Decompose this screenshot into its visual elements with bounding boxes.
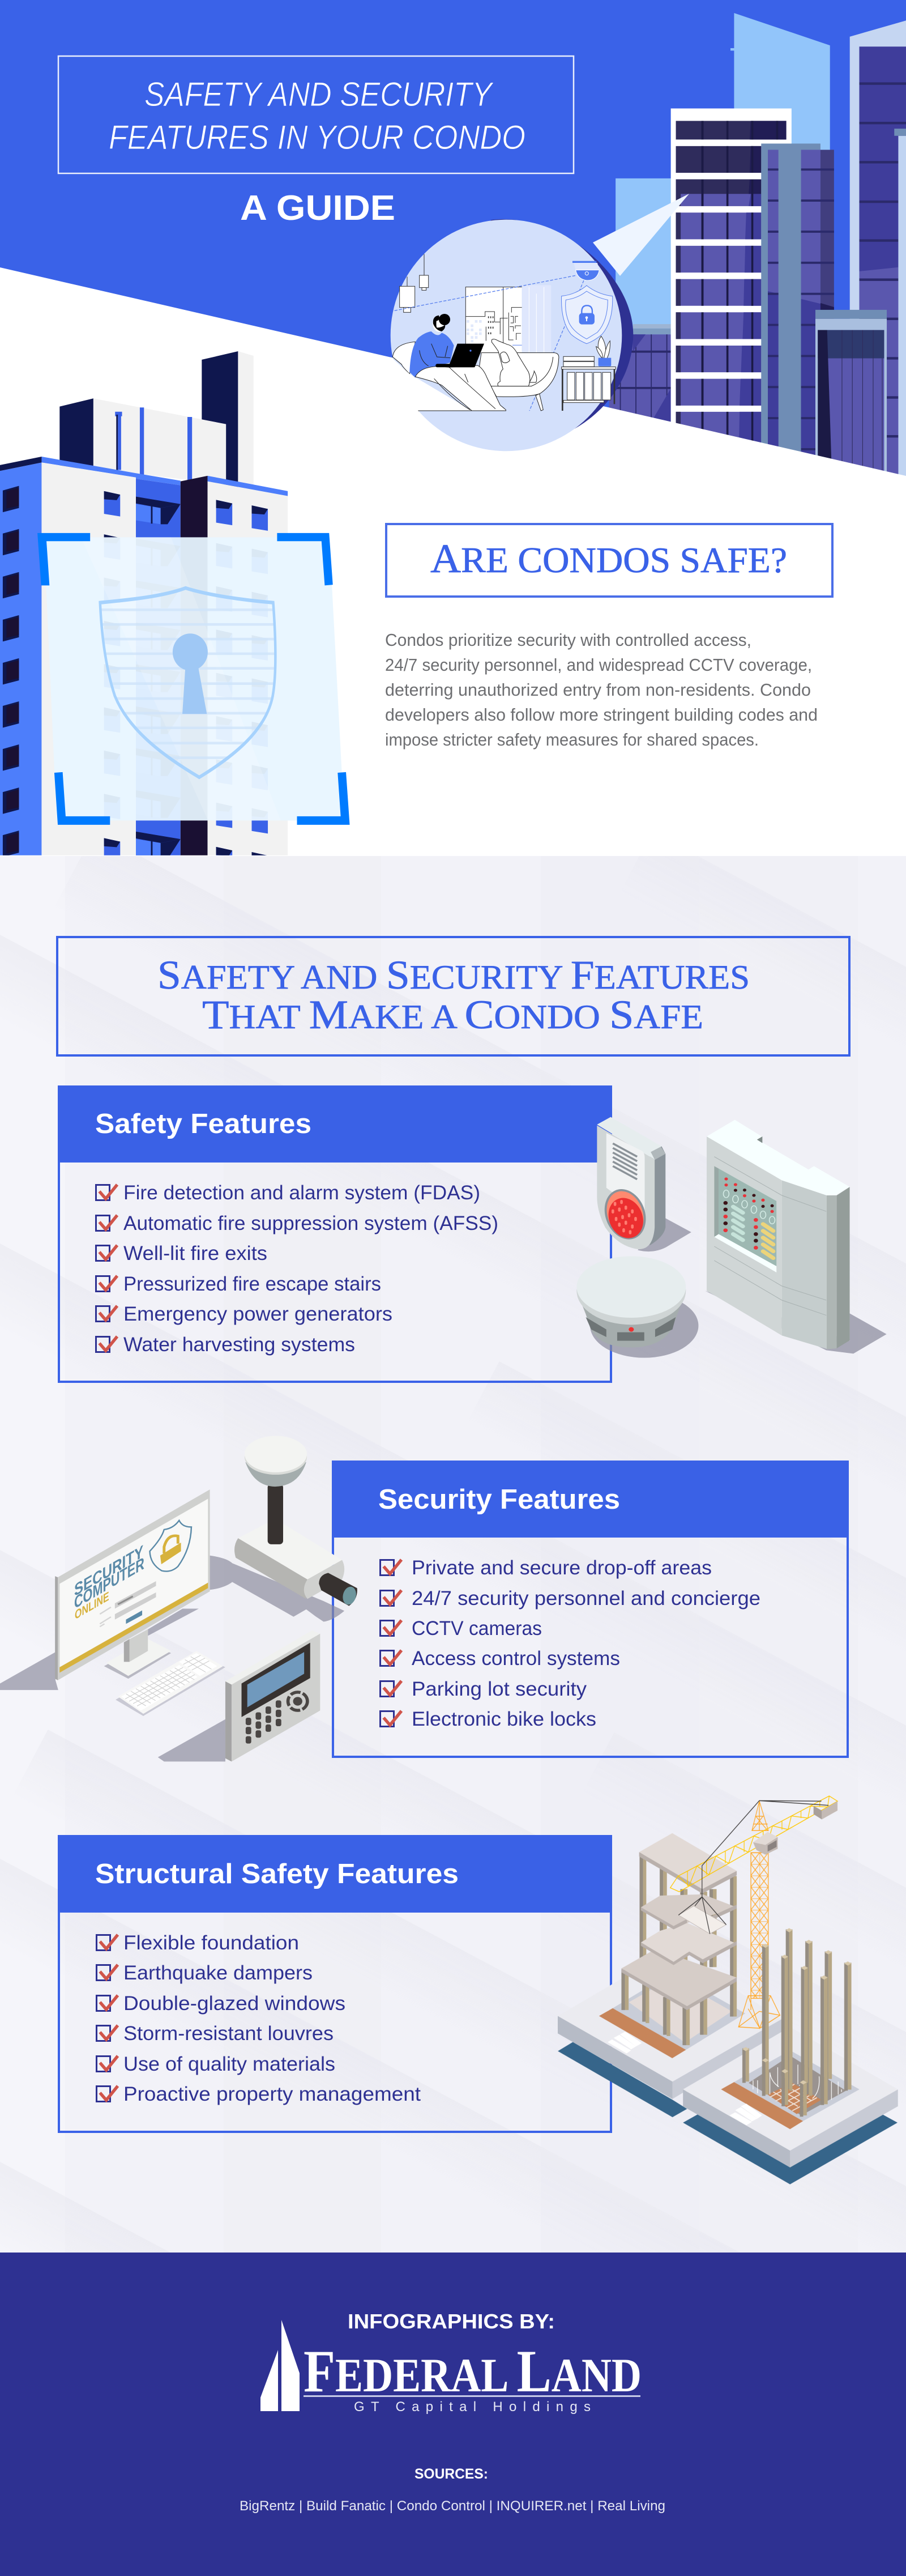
foundation columns — [742, 1928, 852, 2117]
translucent scan panel — [44, 537, 344, 820]
panel title: Structural Safety Features — [95, 1859, 459, 1889]
subtitle: a guide: A GUIDE — [240, 189, 395, 228]
checklist — [96, 1932, 421, 2105]
white diagonal section — [0, 267, 906, 856]
panel header — [332, 1461, 849, 1536]
heading text: ARE CONDOS SAFE? — [430, 536, 787, 581]
checklist: Double-glazed windows — [123, 1992, 345, 2015]
recessed balconies — [136, 497, 181, 859]
intro paragraph: deterring unauthorized entry from non-residents. Condo — [385, 680, 811, 700]
checklist: Well-lit fire exits — [123, 1242, 267, 1264]
left platform — [558, 1949, 781, 2117]
smoke detector — [576, 1256, 698, 1358]
curtain — [522, 285, 551, 353]
windows on front faces — [104, 491, 268, 878]
checklist: Fire detection and alarm system (FDAS) — [123, 1182, 480, 1204]
intro paragraph: impose stricter safety measures for shared spaces. — [385, 730, 759, 750]
scan corner brackets — [37, 533, 350, 825]
intro paragraph: Condos prioritize security with controlled access, — [385, 630, 751, 650]
construction site illustration — [558, 1796, 898, 2185]
right platform — [683, 2027, 898, 2185]
panel title: Security Features — [378, 1484, 620, 1515]
front low tower — [815, 310, 887, 493]
lamps — [400, 254, 429, 312]
screen text: security computer online: SECURITY — [74, 1542, 143, 1600]
checklist: Emergency power generators — [123, 1303, 392, 1325]
footer band — [0, 2253, 906, 2576]
monitor — [55, 1489, 210, 1680]
panel header — [58, 1085, 612, 1161]
light textured background section — [0, 856, 906, 2253]
window view — [465, 287, 522, 353]
checklist — [96, 1182, 498, 1356]
crane — [670, 1796, 837, 2028]
checklist — [381, 1557, 760, 1730]
armchair back — [392, 342, 415, 374]
checklist: Pressurized fire escape stairs — [123, 1273, 381, 1295]
suspended slab — [678, 1897, 726, 1934]
armchair seat — [391, 357, 472, 411]
white frame tower — [671, 108, 792, 497]
checklist: Use of quality materials — [123, 2053, 335, 2075]
checklist: 24/7 security personnel and concierge — [412, 1587, 760, 1610]
panel highlights — [216, 820, 268, 821]
ceiling camera — [572, 261, 599, 280]
fire alarm control panel — [705, 1120, 887, 1353]
panel: security features — [332, 1461, 849, 1757]
checklist: Earthquake dampers — [123, 1962, 313, 1984]
person — [409, 314, 506, 411]
infographics by: INFOGRAPHICS BY: — [348, 2310, 555, 2333]
title text — [109, 75, 525, 156]
title box — [58, 56, 574, 173]
panel header — [58, 1835, 612, 1911]
dark crescent — [491, 219, 633, 429]
light blue tower — [730, 13, 830, 218]
circular illustration: resident in secure condo — [391, 219, 633, 451]
checklist: Private and secure drop-off areas — [412, 1557, 712, 1579]
section heading text — [157, 952, 750, 1037]
far right tower — [850, 20, 906, 497]
sources list: BigRentz | Build Fanatic | Condo Control | INQUIRER.net | Real Living — [240, 2498, 665, 2514]
checklist: Flexible foundation — [123, 1932, 299, 1954]
section heading box — [57, 937, 849, 1055]
concrete building frame — [621, 1833, 737, 2045]
sofa — [480, 353, 559, 411]
checklist: Automatic fire suppression system (AFSS) — [123, 1212, 498, 1234]
panel: structural safety features — [58, 1835, 612, 2132]
checklist: Parking lot security — [412, 1678, 587, 1700]
monitor stand — [104, 1629, 171, 1679]
intro paragraph: developers also follow more stringent building codes and — [385, 705, 818, 725]
checklist: Storm-resistant louvres — [123, 2023, 334, 2045]
Federal Land logo: FEDERAL LAND — [304, 2338, 642, 2404]
checklist: Water harvesting systems — [123, 1334, 355, 1356]
shield with padlock — [561, 286, 613, 344]
rooftop block — [59, 398, 226, 484]
intro paragraph — [385, 630, 818, 750]
section heading text: THAT MAKE A CONDO SAFE — [202, 992, 703, 1037]
section heading text: SAFETY AND SECURITY FEATURES — [157, 952, 750, 998]
panel: safety features — [58, 1085, 612, 1382]
heading box: are condos safe — [386, 524, 832, 597]
Federal Land logo — [260, 2320, 642, 2415]
small left building — [609, 324, 672, 443]
title text: SAFETY AND SECURITY — [144, 75, 494, 113]
screen text: security computer online: ONLINE — [75, 1589, 109, 1623]
checklist: Proactive property management — [123, 2083, 421, 2105]
checklist: Access control systems — [412, 1647, 620, 1670]
main building faces — [0, 457, 288, 859]
access control keypad — [225, 1630, 320, 1761]
shield outline with keyhole — [100, 588, 277, 777]
city skyline — [609, 13, 906, 497]
windows on left face — [3, 486, 19, 857]
beam from building to circle — [593, 194, 689, 276]
left building with security overlay — [0, 351, 350, 878]
sources heading: SOURCES: — [414, 2466, 488, 2482]
dog — [492, 339, 537, 386]
tall rooftop block — [202, 351, 254, 488]
title text: FEATURES IN YOUR CONDO — [109, 118, 525, 156]
side table with books and plant — [562, 336, 616, 411]
checklist: CCTV cameras — [412, 1617, 542, 1640]
slate middle tower — [761, 143, 834, 476]
checklist: Electronic bike locks — [412, 1708, 596, 1730]
background: blue hero — [0, 0, 906, 510]
intro paragraph: 24/7 security personnel, and widespread CCTV coverage, — [385, 655, 812, 675]
fire safety devices illustration — [576, 1117, 887, 1358]
alarm bell — [597, 1117, 691, 1251]
keyboard — [116, 1651, 225, 1716]
CCTV camera — [234, 1436, 358, 1606]
screen text: security computer online: COMPUTER — [74, 1553, 144, 1613]
light blue low tower — [616, 178, 676, 340]
dashed camera sight lines — [395, 275, 584, 411]
panel title: Safety Features — [95, 1109, 311, 1139]
security equipment illustration — [0, 1436, 358, 1761]
pale circle — [391, 220, 622, 451]
cast shadows — [0, 1556, 344, 1761]
Federal Land logo: GT Capital Holdings — [354, 2399, 591, 2415]
